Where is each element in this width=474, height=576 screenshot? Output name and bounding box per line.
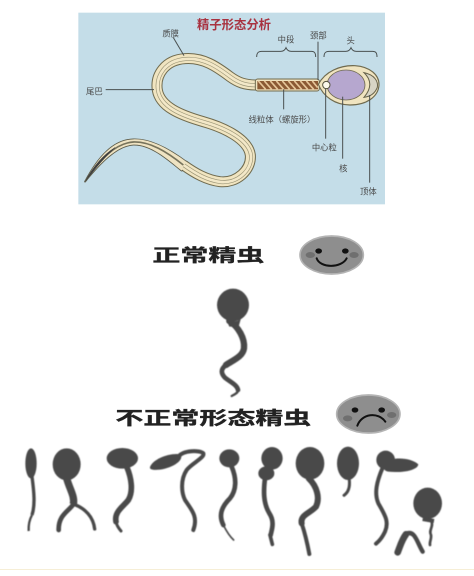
label: neck xyxy=(310,31,327,80)
abnormal sperm: slanted head with bent neck xyxy=(150,451,203,530)
centriole xyxy=(323,81,330,89)
label: centriole: 中心粒 xyxy=(312,143,337,153)
label: centriole xyxy=(312,89,337,153)
abnormal sperm: detached broken tail xyxy=(398,488,442,552)
nucleus xyxy=(327,70,365,100)
label: acrosome xyxy=(360,95,377,197)
abnormal sperm: double head xyxy=(258,447,283,544)
footer rule xyxy=(0,569,474,570)
label: nucleus: 核 xyxy=(339,163,348,173)
label: acrosome: 顶体 xyxy=(360,187,377,197)
label: head bracket xyxy=(324,35,377,57)
abnormal sperm row, left xyxy=(25,448,239,540)
abnormal sperm: large round head xyxy=(296,447,324,554)
label: neck: 颈部 xyxy=(310,31,327,41)
sperm tail xyxy=(85,59,257,182)
section: normal sperm and abnormal heading xyxy=(115,236,400,433)
heading: normal sperm: 正常精虫 xyxy=(152,246,264,265)
abnormal sperm: small round head xyxy=(219,449,239,540)
acrosome xyxy=(364,73,377,97)
head xyxy=(318,66,379,105)
label: head bracket: 头 xyxy=(346,35,355,45)
label: tail xyxy=(86,87,154,97)
label: mitochondria: 线粒体（螺旋形） xyxy=(249,115,315,125)
label: membrane xyxy=(162,28,184,56)
midpiece with mitochondria xyxy=(255,79,319,91)
abnormal sperm: short tail xyxy=(337,447,359,495)
normal sperm silhouette xyxy=(217,289,249,396)
tail tip inner line xyxy=(86,142,183,181)
label: nucleus xyxy=(339,97,348,173)
icon: smiling face xyxy=(300,236,363,274)
label: tail: 尾巴 xyxy=(86,87,103,97)
label: mitochondria xyxy=(249,89,315,125)
abnormal sperm: two lobed head xyxy=(376,451,418,544)
abnormal sperm: narrow head xyxy=(25,448,37,531)
abnormal sperm: forked tail xyxy=(53,448,95,530)
heading: abnormal morphology sperm: 不正常形态精虫 xyxy=(115,408,311,429)
heading: diagram title: 精子形态分析 xyxy=(197,17,271,32)
icon: sad face xyxy=(337,395,400,433)
tail tip shade xyxy=(86,148,115,181)
abnormal sperm row, right xyxy=(258,447,442,554)
abnormal sperm: wide flat head xyxy=(107,448,138,531)
label: membrane: 质膜 xyxy=(162,28,179,38)
label: midpiece bracket xyxy=(257,35,316,57)
label: midpiece bracket: 中段 xyxy=(278,35,294,45)
panel: sperm morphology diagram xyxy=(78,13,385,204)
